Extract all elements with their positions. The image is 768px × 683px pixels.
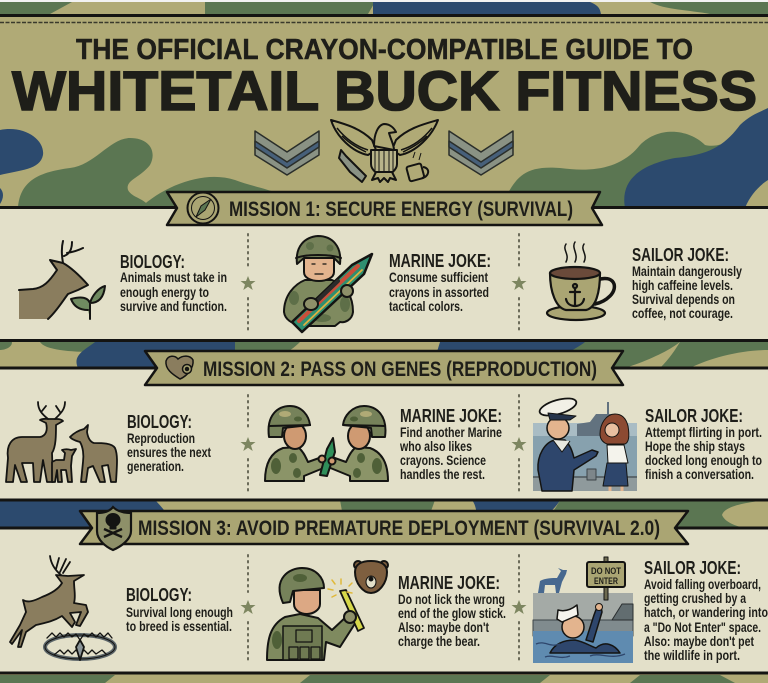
marine joke text 1: MARINE JOKE:: [389, 251, 491, 271]
icon: eagle with crayon and coffee: [331, 120, 438, 182]
marine joke text 1: [389, 251, 491, 314]
icon: sailor overboard with sign and deer: ENTER: [594, 576, 618, 587]
marine joke text 2: who also likes: [399, 438, 472, 454]
marine joke text 3: Do not lick the wrong: [398, 591, 505, 607]
biology text 3: to breed is essential.: [126, 618, 232, 634]
marine joke text 3: Also: maybe don't: [398, 619, 489, 635]
icon: left chevrons: [255, 131, 319, 175]
biology text 1: [120, 252, 227, 314]
biology text 3: [126, 585, 233, 634]
icon: sailor flirting in port: [533, 395, 637, 491]
icon: compass: [188, 192, 218, 224]
biology text 2: generation.: [127, 458, 184, 474]
panel background 3: [0, 528, 768, 673]
icon: marine with glow stick and bear: [267, 561, 388, 660]
panel: mission 3: [0, 507, 768, 673]
marine joke text 2: [399, 406, 502, 482]
marine joke text 2: Find another Marine: [400, 424, 502, 440]
title: WHITETAIL BUCK FITNESS: [12, 59, 757, 122]
header rules: [0, 14, 768, 22]
banner: mission 1: [167, 192, 602, 225]
icon: skull shield: [97, 507, 131, 550]
icon: sailor overboard with sign and deer: [533, 557, 633, 663]
marine joke text 3: charge the bear.: [398, 633, 480, 649]
panel: mission 2: [0, 351, 768, 500]
biology text 2: BIOLOGY:: [127, 412, 192, 432]
biology text 3: Survival long enough: [126, 604, 233, 620]
panel: mission 1: [0, 192, 768, 340]
sailor joke text 1: Survival depends on: [632, 291, 735, 307]
sailor joke text 1: SAILOR JOKE:: [632, 245, 729, 265]
divider with star 1a: [240, 234, 256, 331]
icon: heart with target: [166, 356, 193, 379]
sailor joke text 3: the wildlife in port.: [644, 647, 740, 663]
mission 3 heading: MISSION 3: AVOID PREMATURE DEPLOYMENT (SURVIVAL 2.0): [138, 517, 660, 540]
marine joke text 2: crayons. Science: [400, 452, 486, 468]
mission 1 heading: MISSION 1: SECURE ENERGY (SURVIVAL): [229, 198, 573, 221]
divider with star 1b: [512, 234, 526, 331]
panel background 2: [0, 368, 768, 500]
mission 2 heading: MISSION 2: PASS ON GENES (REPRODUCTION): [203, 358, 597, 381]
banner: mission 3: [80, 507, 688, 550]
icon: coffee cup with anchor: [547, 242, 614, 320]
marine joke text 2: MARINE JOKE:: [400, 406, 502, 426]
marine joke text 1: tactical colors.: [389, 298, 463, 314]
biology text 1: enough energy to: [120, 284, 209, 300]
biology text 3: BIOLOGY:: [126, 585, 192, 605]
icon: deer family: [6, 402, 117, 482]
icon: deer and leaves: [19, 241, 105, 319]
biology text 1: survive and function.: [120, 298, 227, 314]
divider with star 2b: [512, 395, 526, 491]
divider with star 3a: [240, 555, 256, 663]
biology text 2: ensures the next: [127, 444, 211, 460]
marine joke text 3: end of the glow stick.: [398, 605, 506, 621]
biology text 1: Animals must take in: [120, 269, 227, 285]
sailor joke text 1: high caffeine levels.: [632, 277, 733, 293]
banner: mission 2: [145, 351, 623, 385]
biology text 2: Reproduction: [127, 430, 195, 446]
icon: sailor overboard with sign and deer: DO NOT: [591, 566, 621, 577]
biology text 2: [127, 412, 211, 474]
marine joke text 3: [398, 573, 506, 649]
sailor joke text 1: [632, 245, 742, 321]
biology text 1: BIOLOGY:: [120, 252, 185, 272]
marine joke text 1: Consume sufficient: [389, 269, 488, 285]
icon: leaping deer over trap: [10, 556, 115, 660]
panel background 1: [0, 208, 768, 340]
marine joke text 2: handles the rest.: [400, 466, 485, 482]
sailor joke text 2: [645, 406, 762, 482]
sailor joke text 3: [644, 558, 768, 663]
icon: marine with crayon: [284, 236, 372, 332]
title: THE OFFICIAL CRAYON-COMPATIBLE GUIDE TO: [76, 34, 693, 66]
divider with star 3b: [512, 555, 526, 663]
marine joke text 3: MARINE JOKE:: [398, 573, 500, 593]
sailor joke text 1: coffee, not courage.: [632, 305, 733, 321]
marine joke text 1: crayons in assorted: [389, 284, 489, 300]
divider with star 2a: [240, 395, 256, 491]
icon: two marines with crayon: [265, 406, 388, 481]
icon: right chevrons: [449, 131, 513, 175]
